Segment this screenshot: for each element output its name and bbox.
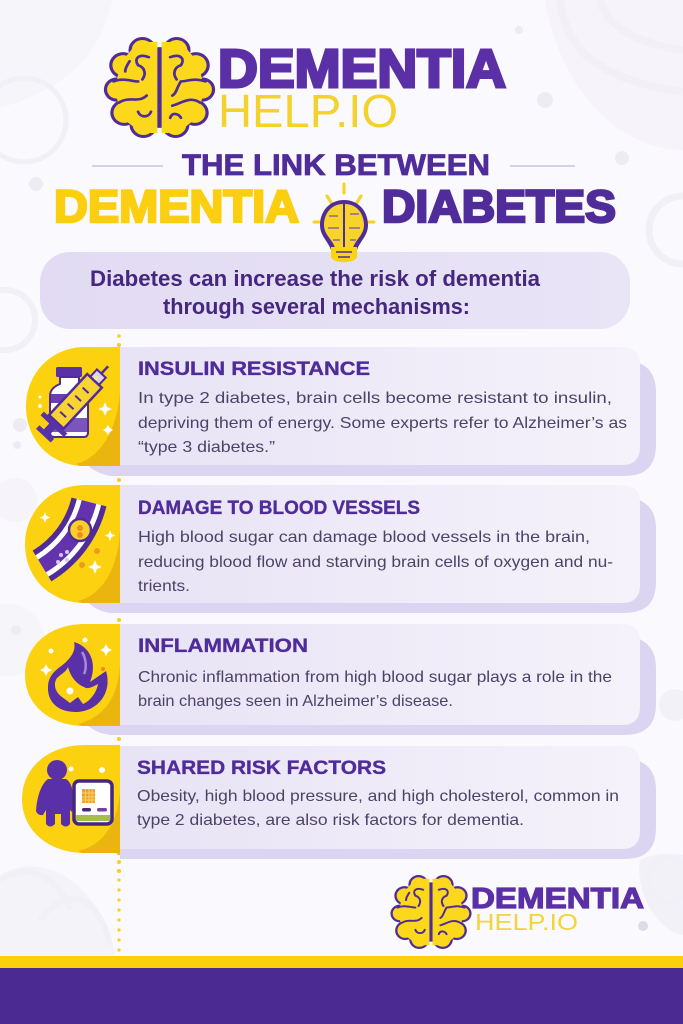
heading: SHARED RISK FACTORS xyxy=(137,757,386,779)
heading: INSULIN RESISTANCE xyxy=(138,358,370,380)
title word: Diabetes: DIABETES xyxy=(382,181,616,232)
panel: damage to blood vessels xyxy=(25,485,656,613)
footer wordmark: Help.io: HELP.IO xyxy=(475,909,578,935)
heading: INFLAMMATION xyxy=(138,635,308,657)
title word: Dementia: DEMENTIA xyxy=(54,181,299,232)
panel: inflammation xyxy=(25,624,656,735)
panel: shared risk factors xyxy=(22,745,656,859)
intro text: through several mechanisms: xyxy=(163,294,470,319)
body text: “type 3 diabetes.” xyxy=(138,439,275,456)
body text: reducing blood flow and starving brain cells of oxygen and nu- xyxy=(138,554,613,571)
body text: High blood sugar can damage blood vessels in the brain, xyxy=(138,529,590,546)
icon: logo brain xyxy=(104,37,215,138)
footer band xyxy=(0,956,683,1024)
title xyxy=(54,149,616,232)
heading: DAMAGE TO BLOOD VESSELS xyxy=(138,497,420,519)
title line: The Link Between: THE LINK BETWEEN xyxy=(182,149,490,182)
intro text: Diabetes can increase the risk of dementia xyxy=(90,266,541,291)
footer wordmark: Dementia: DEMENTIA xyxy=(471,883,644,915)
icon: footer logo brain xyxy=(390,875,472,949)
icon: flame xyxy=(40,638,112,712)
timeline dots xyxy=(117,334,121,952)
logo: Dementia Help.io header xyxy=(104,37,506,138)
body text: Chronic inflammation from high blood sugar plays a role in the xyxy=(138,669,612,686)
body text: brain changes seen in Alzheimer’s disease. xyxy=(138,693,453,710)
logo wordmark: Dementia: DEMENTIA xyxy=(218,39,506,99)
icon: light bulb with brain xyxy=(314,184,374,262)
body text: depriving them of energy. Some experts refer to Alzheimer’s as xyxy=(138,415,627,432)
icon: person and glucose monitor xyxy=(36,760,112,826)
icon: vial and syringe xyxy=(32,355,120,447)
panel: intro xyxy=(40,252,630,329)
body text: In type 2 diabetes, brain cells become resistant to insulin, xyxy=(138,390,612,407)
body text: type 2 diabetes, are also risk factors for dementia. xyxy=(137,812,524,829)
body text: trients. xyxy=(138,578,190,595)
logo wordmark: Help.io: HELP.IO xyxy=(218,85,398,137)
body text: Obesity, high blood pressure, and high cholesterol, common in xyxy=(137,788,619,805)
icon: blood vessel xyxy=(40,502,116,574)
panel: insulin resistance xyxy=(26,347,656,476)
logo: Dementia Help.io footer xyxy=(390,875,644,949)
